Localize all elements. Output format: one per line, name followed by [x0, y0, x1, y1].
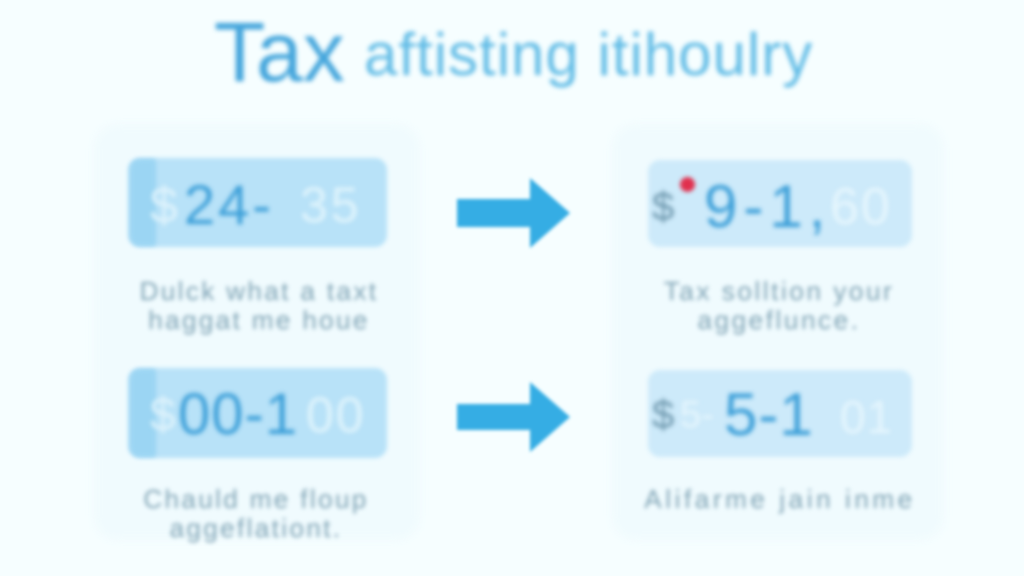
icon: red dot: [680, 177, 695, 192]
caption: bottom left: aggeflationt.: [170, 513, 342, 543]
value box: top left: 24-: [184, 173, 274, 236]
caption: top right: aggeflunce.: [697, 305, 861, 335]
caption: bottom right: Alifarme jain inme: [644, 484, 916, 514]
caption: bottom left: [142, 484, 369, 546]
value box: top right: 9-1,: [704, 173, 831, 240]
value box: top left: $: [150, 177, 178, 233]
value box: bottom right: 01: [840, 391, 893, 443]
panel: right: [612, 124, 944, 540]
value box: bottom right: 5-1: [724, 381, 814, 448]
caption: bottom left: Chauld me floup: [143, 484, 369, 514]
value box: bottom right: 5-: [680, 394, 714, 436]
title: [212, 5, 814, 99]
value box: bottom left: 00: [306, 387, 366, 443]
title: Tax: [214, 5, 345, 99]
value box: top left: 35: [300, 177, 362, 233]
caption: top right: Tax solltion your: [664, 276, 894, 306]
value box: top right: $: [652, 185, 674, 229]
value box: bottom left: $: [150, 388, 176, 440]
value box: bottom left: [126, 365, 389, 461]
value box: top left: [126, 155, 389, 250]
arrow: bottom: [454, 380, 572, 454]
caption: top left: haggat me houe: [148, 305, 370, 335]
value box: bottom left: 00-1: [178, 382, 298, 447]
value box: top right: 60: [830, 178, 892, 236]
value box: bottom right: $: [652, 393, 674, 437]
arrow: top: [454, 176, 572, 250]
title: aftisting itihoulry: [364, 21, 813, 88]
value box: bottom right: [646, 368, 914, 458]
caption: top left: Dulck what a taxt: [140, 276, 378, 306]
caption: top left: [138, 276, 378, 337]
value box: top right: [646, 158, 914, 248]
caption: top right: [662, 276, 894, 337]
panel: left: [94, 124, 420, 540]
